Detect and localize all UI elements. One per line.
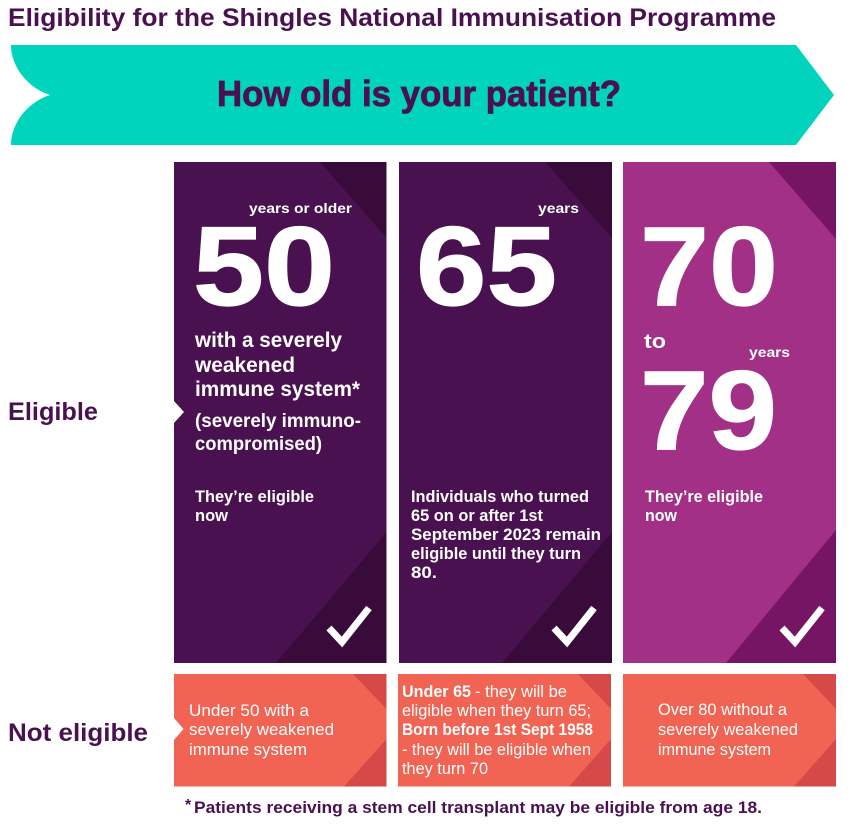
banner: how old is your patient: How old is your patient? <box>217 73 621 114</box>
text: Over 80 without a <box>658 700 788 719</box>
text: eligible when they turn 65; <box>402 701 591 720</box>
eligibility note: now <box>195 506 229 525</box>
text: they turn 70 <box>402 759 488 778</box>
text: severely weakened <box>658 720 798 739</box>
icon: check mark <box>329 608 369 642</box>
eligibility note <box>645 487 763 525</box>
eligibility note: 65 on or after 1st <box>411 506 543 525</box>
panel: 70 to 79 years <box>623 162 836 663</box>
text: immune system <box>189 740 307 759</box>
eligibility note <box>411 487 601 582</box>
connector word: to <box>644 331 666 353</box>
text <box>402 682 593 778</box>
title: Eligibility for the Shingles National Immunisation Programme <box>8 4 776 32</box>
banner: how old is your patient <box>11 45 834 145</box>
footnote: Patients receiving a stem cell transplant may be eligible from age 18. <box>194 799 762 817</box>
condition text: immune system* <box>195 378 361 401</box>
eligibility note: 80. <box>411 563 437 582</box>
text: - they will be eligible when <box>402 740 591 759</box>
condition text: with a severely <box>194 329 342 352</box>
eligibility note: Individuals who turned <box>411 487 589 506</box>
text <box>658 700 798 759</box>
condition text: weakened <box>194 354 295 377</box>
age unit: years <box>749 345 790 360</box>
eligibility note: September 2023 remain <box>411 525 601 544</box>
row label: not eligible: Not eligible <box>8 719 148 747</box>
eligibility note: now <box>645 506 678 525</box>
eligibility note: They’re eligible <box>195 487 314 506</box>
age unit: years or older <box>249 201 353 216</box>
panel: 65 years <box>399 162 612 663</box>
eligibility note: eligible until they turn <box>411 544 581 563</box>
row label: eligible: Eligible <box>8 398 98 426</box>
eligibility note: They’re eligible <box>645 487 763 506</box>
panel: under 50 not eligible <box>174 674 386 786</box>
panel: over 80 not eligible <box>623 674 836 786</box>
icon: check mark <box>554 608 594 642</box>
condition text <box>194 329 361 455</box>
text: Under 50 with a <box>189 701 310 720</box>
icon: check mark <box>782 608 822 642</box>
age number 79: 79 <box>640 348 777 473</box>
text: severely weakened <box>189 720 334 739</box>
panel: 50 years or older <box>174 162 386 663</box>
eligibility note <box>195 487 314 525</box>
text: Born before 1st Sept 1958 <box>402 720 593 739</box>
text: immune system <box>658 740 771 759</box>
age number 65: 65 <box>416 204 557 329</box>
age unit: years <box>538 201 579 216</box>
age number 50: 50 <box>193 204 335 329</box>
condition text: compromised) <box>195 434 322 455</box>
age number 70: 70 <box>640 204 778 329</box>
text: Under 65 <box>402 682 471 701</box>
text: - they will be <box>475 682 567 701</box>
text <box>189 701 334 759</box>
panel: under 65 not eligible <box>398 674 611 786</box>
footnote: * <box>185 797 192 814</box>
condition text: (severely immuno- <box>195 411 361 432</box>
